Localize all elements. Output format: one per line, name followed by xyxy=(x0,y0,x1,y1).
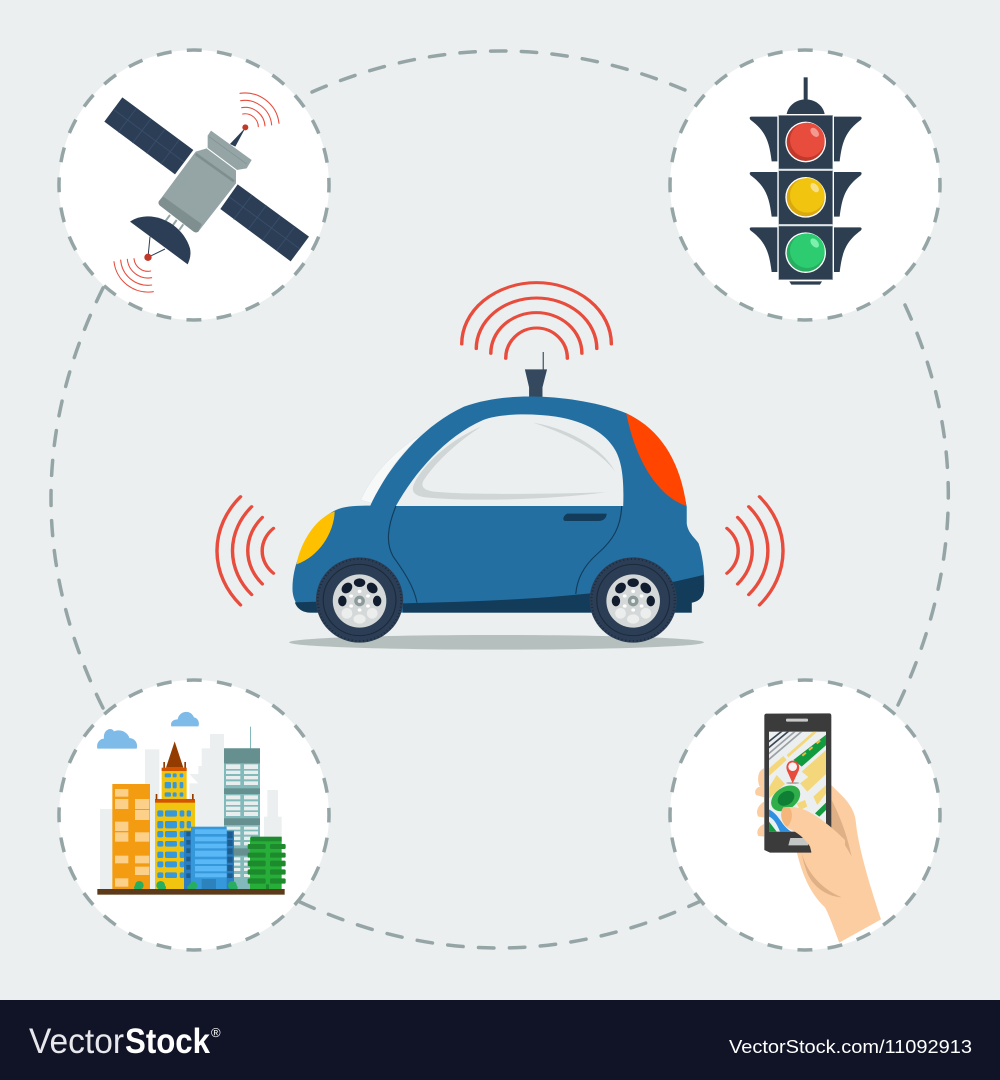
blue building xyxy=(184,827,234,889)
red light xyxy=(785,122,826,162)
car shadow xyxy=(289,635,704,650)
traffic light circle xyxy=(670,50,940,320)
roof antenna xyxy=(525,352,547,397)
car body xyxy=(292,397,704,613)
logo: Vector xyxy=(29,1022,124,1061)
icon: city xyxy=(97,712,286,895)
headlight xyxy=(296,511,335,564)
image id: VectorStock.com/11092913 xyxy=(729,1036,972,1057)
dashed connector: top xyxy=(312,51,685,92)
yellow tower xyxy=(155,741,195,889)
rear wheel xyxy=(590,557,677,643)
footer bar xyxy=(0,1000,1000,1080)
panel: phone xyxy=(670,680,940,950)
signal waves: front xyxy=(217,497,273,605)
green building xyxy=(248,837,286,889)
bushes xyxy=(134,881,238,890)
window reflections xyxy=(413,423,615,500)
satellite circle xyxy=(59,50,329,320)
signal waves: rear xyxy=(727,497,783,605)
door outline xyxy=(388,506,622,603)
door handle xyxy=(563,514,607,521)
panel: city xyxy=(59,680,329,950)
map pin xyxy=(786,761,799,784)
icon: traffic light xyxy=(750,77,862,285)
logo bold: Stock xyxy=(125,1022,210,1061)
registered mark: ® xyxy=(211,1025,221,1040)
windshield xyxy=(361,433,424,503)
car illustration xyxy=(217,283,783,650)
map xyxy=(769,732,826,832)
car underside xyxy=(295,575,704,613)
icon: satellite xyxy=(104,93,309,292)
side window xyxy=(396,414,623,506)
orange building xyxy=(112,784,150,889)
panel: satellite xyxy=(59,50,329,320)
icon: hand holding phone xyxy=(755,713,881,943)
dashed connector: right xyxy=(898,305,948,705)
phone circle xyxy=(670,680,940,950)
signal waves: top xyxy=(462,283,611,358)
front wheel xyxy=(316,557,403,643)
dashed connector: bottom xyxy=(300,900,703,948)
green light xyxy=(785,232,826,273)
yellow light xyxy=(785,177,826,218)
panel: traffic light xyxy=(670,50,940,320)
dashed connector: left xyxy=(51,288,103,708)
city circle xyxy=(59,680,329,950)
tail light xyxy=(626,413,686,506)
